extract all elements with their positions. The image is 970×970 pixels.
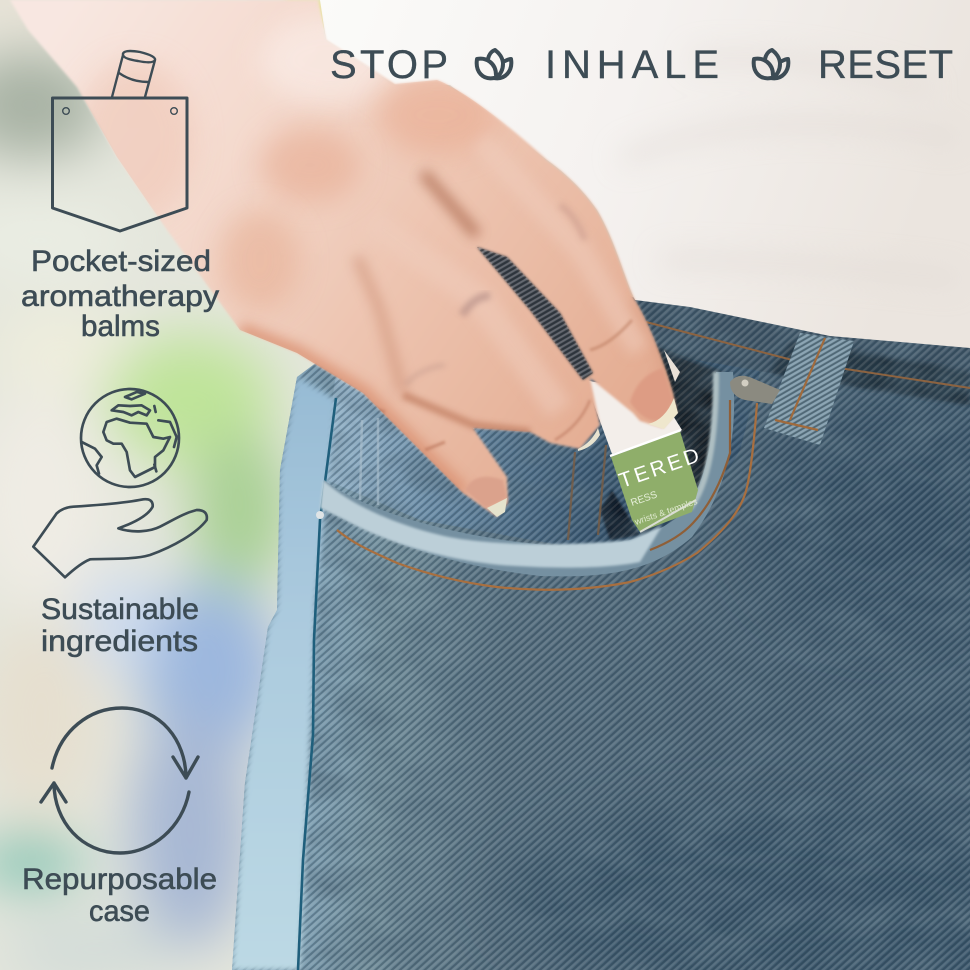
label: sustainable ingredients	[41, 593, 199, 658]
icon: lotus right	[754, 50, 788, 78]
dark pocket interior	[640, 345, 722, 535]
balm tube: RESS	[629, 489, 659, 509]
fingernails	[630, 368, 673, 421]
balm tube: wrists & temples	[632, 496, 699, 527]
tagline: stop inhale reset: STOP	[330, 43, 448, 87]
balm tube: TERED	[616, 443, 705, 493]
blurred garden background	[0, 0, 340, 970]
grooves between fingers	[423, 173, 477, 235]
label: repurposable case	[22, 863, 217, 928]
balm tube	[585, 380, 705, 532]
tagline: stop inhale reset: RESET	[818, 43, 953, 87]
joint creases	[560, 205, 585, 240]
jeans	[230, 240, 970, 970]
label: pocket-sized aromatherapy balms: aromatherapy	[21, 280, 219, 313]
icon: globe	[81, 389, 179, 487]
label: repurposable case: case	[89, 895, 150, 928]
label: sustainable ingredients: ingredients	[41, 625, 198, 658]
rivet	[730, 376, 780, 404]
shirt	[320, 0, 970, 348]
label: pocket-sized aromatherapy balms: Pocket-sized	[31, 245, 211, 278]
pocket lip and stitching	[322, 372, 734, 576]
knuckle shading	[377, 75, 497, 155]
belt loop	[764, 333, 854, 445]
icon: pocket with balm	[52, 51, 187, 231]
upper panel above pocket	[328, 358, 760, 544]
tagline: stop inhale reset	[330, 43, 953, 87]
icon: lotus left	[477, 50, 511, 78]
label: pocket-sized aromatherapy balms: balms	[81, 310, 160, 343]
icon: circular arrows	[41, 708, 198, 853]
mottling and twill texture	[230, 240, 970, 970]
icon: open hand	[33, 499, 207, 577]
waistband	[638, 301, 970, 373]
label: repurposable case: Repurposable	[22, 863, 217, 896]
light outer side seam strip	[232, 377, 336, 970]
label: pocket-sized aromatherapy balms	[21, 245, 219, 343]
denim visible between index and middle fingers	[477, 247, 593, 380]
finger highlights	[480, 140, 640, 350]
label: sustainable ingredients: Sustainable	[41, 593, 199, 626]
tagline: stop inhale reset: INHALE	[545, 43, 719, 87]
hand	[10, 0, 680, 517]
